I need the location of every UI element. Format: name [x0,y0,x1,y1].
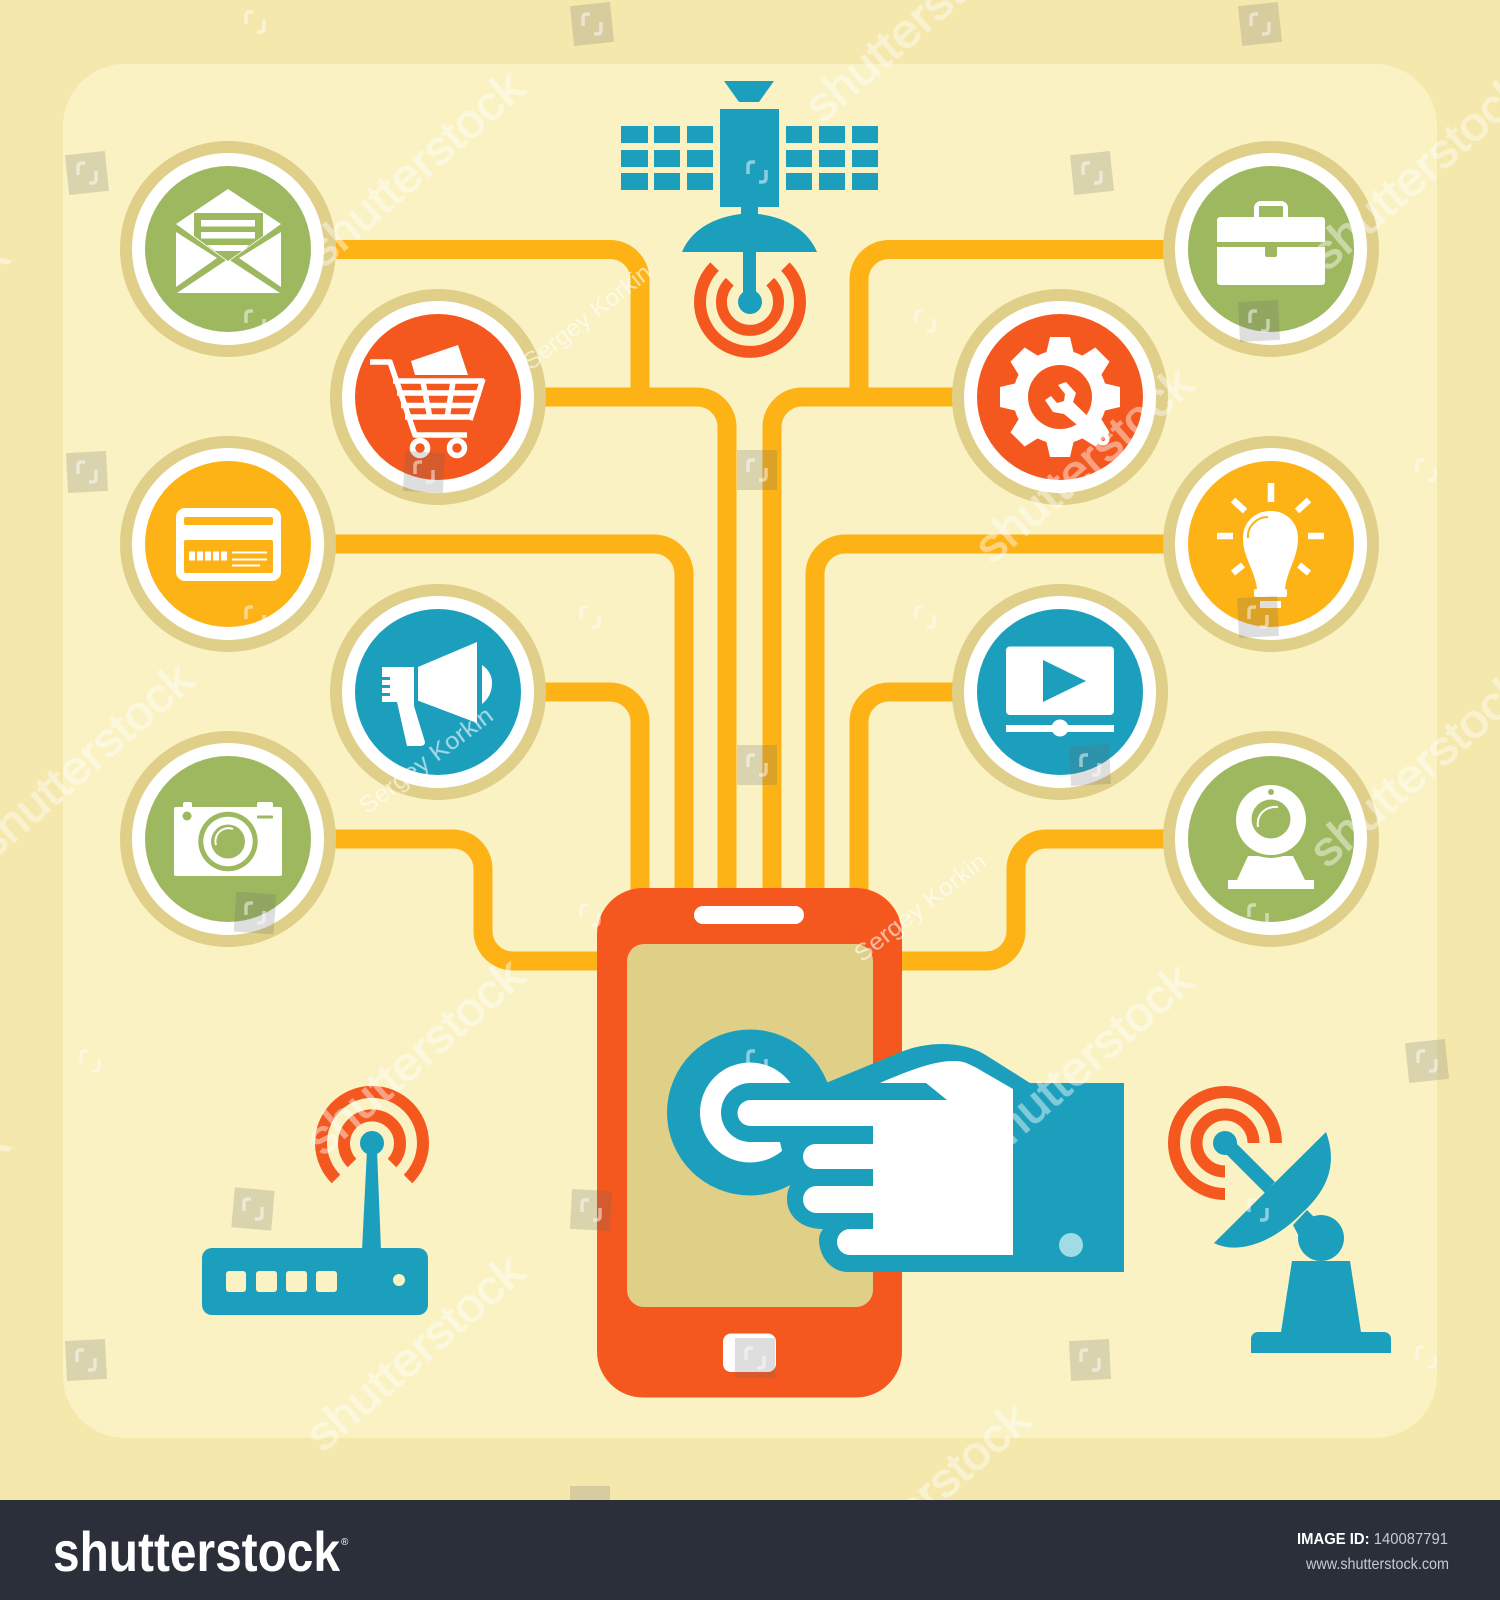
watermarks: shutterstock [964,952,1203,1170]
footer band [0,1500,1500,1600]
white hand [738,1061,1013,1255]
icon: satellite signal arcs [700,267,800,352]
touch ring [667,1030,833,1196]
satellite [621,81,878,314]
icon: webcam [1228,782,1314,889]
icon circle: webcam [1163,731,1379,947]
hand outline and sleeve [721,1044,1124,1272]
wifi router [202,1092,428,1315]
icon circle: megaphone [330,584,546,800]
icon: router signal arcs [321,1092,423,1179]
icon: satellite body [682,109,817,302]
watermarks: Sergey Korkin [518,259,657,376]
icon: satellite transmitter dot [738,290,762,314]
footer logo: shutterstock [53,1520,341,1583]
icon: video screen [1006,646,1114,736]
icon: satellite antenna cap [724,81,774,102]
icon: gear [1000,337,1120,457]
watermarks: shutterstock [295,59,534,277]
icon: bulb rays [1217,483,1324,573]
icon circle: light bulb [1163,436,1379,652]
icon: router antenna tip [360,1131,384,1155]
watermarks: shutterstock [295,1243,534,1461]
icon: satellite right solar panel [786,126,878,190]
watermarks: shutterstock [295,947,534,1165]
icon circle: gear and wrench [952,289,1168,505]
icon circle: video player [952,584,1168,800]
connector lines [334,250,1166,961]
icon: briefcase [1217,201,1325,285]
icon: megaphone [382,642,492,746]
icon circle: shopping cart [330,289,546,505]
icon: dish signal arcs [1174,1092,1276,1194]
watermarks: shutterstock [964,355,1203,573]
phone screen [627,944,873,1307]
icon: camera body [174,802,282,876]
phone home button [723,1334,776,1372]
icon: satellite left solar panel [621,126,713,190]
icon: router antenna [362,1150,381,1250]
footer image id: IMAGE ID: 140087791 [1297,1531,1448,1548]
sleeve button [1059,1233,1083,1257]
icon: card [176,508,281,581]
watermarks: Sergey Korkin [354,702,498,820]
icon circle: credit card [120,436,336,652]
icon circle: camera [120,731,336,947]
icon circle: briefcase [1163,141,1379,357]
icon: router box [202,1248,428,1315]
icon: bulb [1243,511,1298,608]
inner rounded panel [63,64,1437,1438]
icon: dish receiver [1213,1131,1391,1353]
phone speaker [694,906,804,924]
hand pressing touch point [667,1030,1124,1272]
icon circle: email [120,141,336,357]
icon: envelope [176,189,281,293]
satellite dish [1174,1092,1391,1353]
icon: cart [370,345,484,456]
smartphone [597,888,902,1398]
icon: wrench [1045,382,1110,446]
footer website: www.shutterstock.com [1305,1556,1449,1573]
watermarks: Sergey Korkin [849,848,992,968]
footer registered mark: ® [341,1537,349,1548]
